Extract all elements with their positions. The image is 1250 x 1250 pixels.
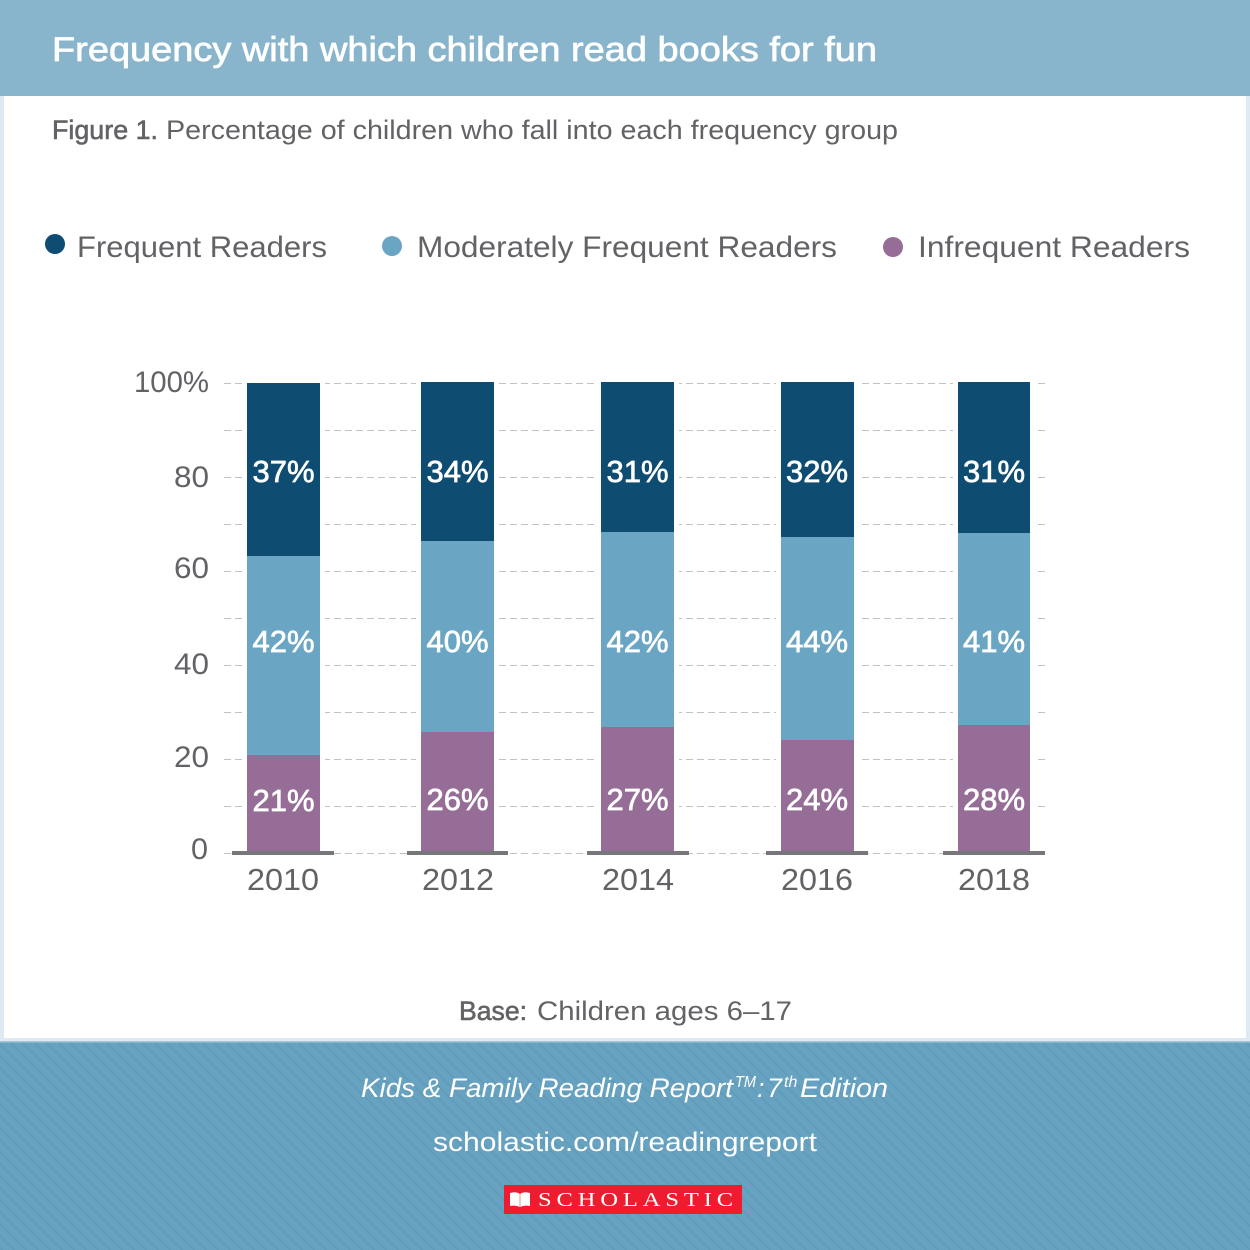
legend item: moderately frequent readers: Moderately Frequent Readers <box>417 231 837 264</box>
bar: 2014: 27% <box>606 782 669 817</box>
y axis labels: 60 <box>174 552 209 585</box>
bar: 2014: 2014 <box>602 862 674 897</box>
bar: 2018: 41% <box>963 624 1025 659</box>
bar: 2016: 2016 <box>781 862 853 897</box>
bar: 2018 <box>943 382 1045 897</box>
report title: Edition <box>800 1073 888 1103</box>
bar: 2016 <box>766 382 868 897</box>
report url: scholastic.com/readingreport <box>433 1127 818 1157</box>
report title: Kids & Family Reading Report <box>361 1073 735 1103</box>
base note: Base: <box>459 996 527 1026</box>
title: Frequency with which children read books for fun <box>52 31 877 69</box>
bar: 2016: 44% <box>786 624 848 659</box>
bar: 2016: 24% <box>786 782 848 817</box>
bar: 2012: 40% <box>426 624 489 659</box>
legend item: frequent readers: Frequent Readers <box>77 231 327 264</box>
bar: 2010: 2010 <box>247 862 319 897</box>
figure caption: Figure 1. <box>52 115 158 145</box>
bar: 2012: 26% <box>426 782 489 817</box>
y axis labels: 20 <box>174 741 209 774</box>
bar: 2010: 21% <box>252 783 315 818</box>
scholastic logo <box>504 1185 742 1214</box>
footer <box>0 1041 1250 1250</box>
y axis labels: 100% <box>134 366 209 399</box>
bar: 2018: 31% <box>963 454 1025 489</box>
icon: open book <box>510 1192 530 1207</box>
report title: th <box>784 1074 797 1091</box>
figure caption: Percentage of children who fall into each frequency group <box>166 115 898 145</box>
report title: TM <box>735 1074 757 1091</box>
bar: 2010: 37% <box>252 454 315 489</box>
bar: 2012: 34% <box>426 454 489 489</box>
bar: 2012 <box>407 382 508 897</box>
bar: 2014: 42% <box>606 624 669 659</box>
legend <box>45 231 1190 264</box>
bar: 2010: 42% <box>252 624 315 659</box>
bar: 2014 <box>587 382 689 897</box>
bar: 2012: 2012 <box>422 862 494 897</box>
white gaps around bars <box>242 376 1035 851</box>
bar: 2014: 31% <box>606 454 669 489</box>
y axis labels: 80 <box>174 461 209 494</box>
bar: 2018: 2018 <box>958 862 1030 897</box>
report title: 7 <box>767 1073 783 1103</box>
header banner <box>0 0 1250 96</box>
bar: 2016: 32% <box>786 454 848 489</box>
y axis labels: 40 <box>174 648 209 681</box>
y axis labels <box>134 366 209 866</box>
bar: 2010 <box>232 383 334 897</box>
scholastic logo: SCHOLASTIC <box>538 1189 738 1211</box>
legend item: infrequent readers: Infrequent Readers <box>918 231 1190 264</box>
base note: Children ages 6–17 <box>537 996 792 1026</box>
report title <box>361 1073 888 1103</box>
bar: 2018: 28% <box>963 782 1025 817</box>
y axis labels: 0 <box>191 833 208 866</box>
report title: : <box>757 1073 765 1103</box>
stacked bar chart <box>134 366 1049 897</box>
